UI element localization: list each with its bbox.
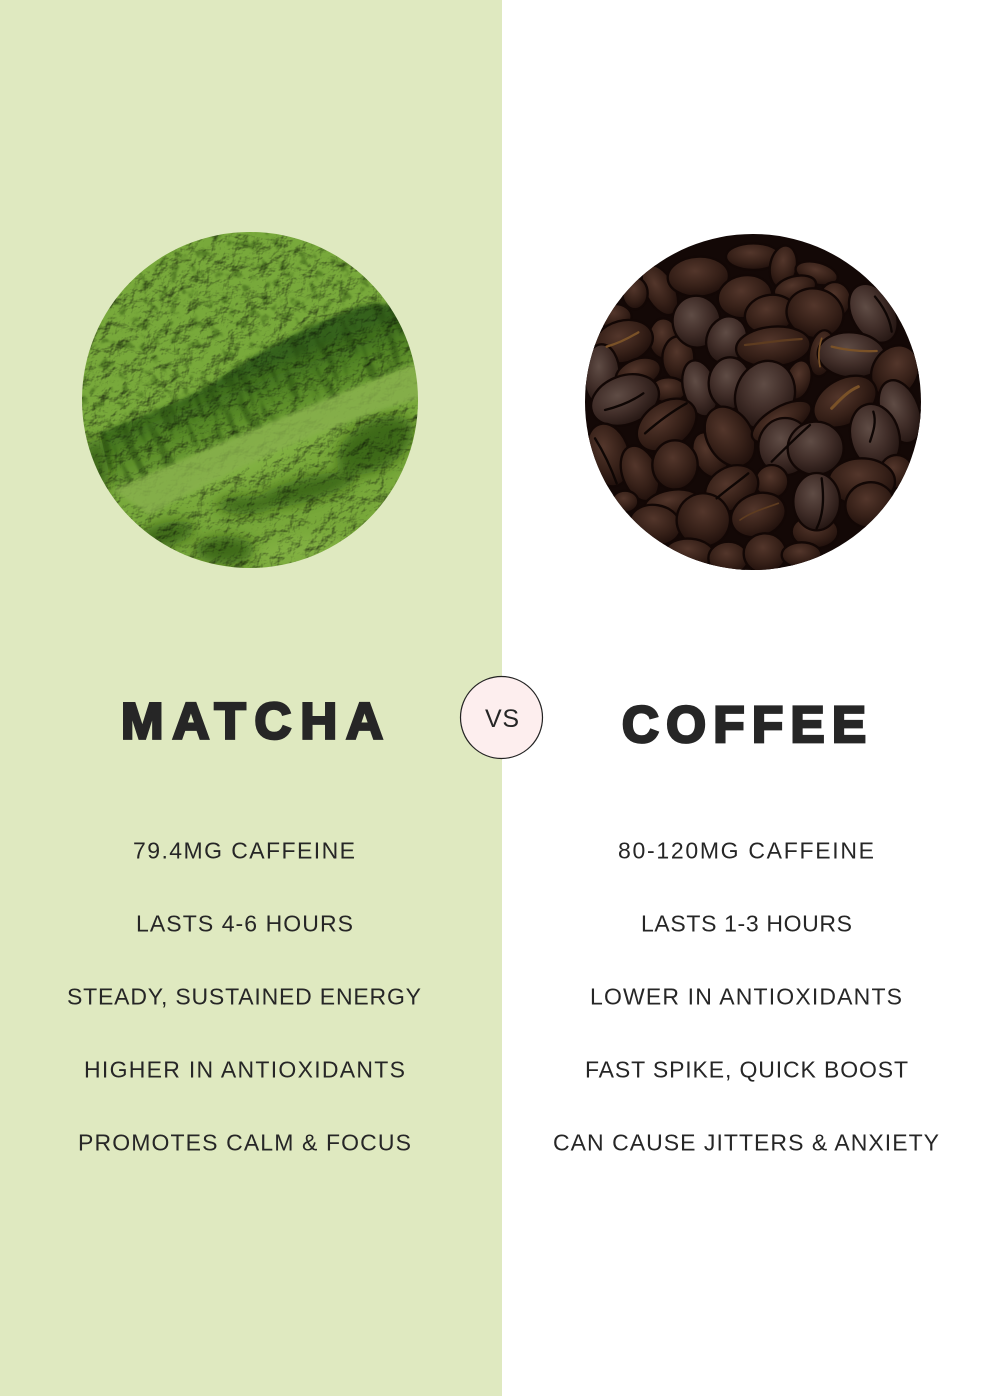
text block: matcha facts: PROMOTES CALM & FOCUS bbox=[78, 1130, 411, 1156]
text block: coffee facts: LASTS 1-3 HOURS bbox=[641, 910, 852, 936]
panel: matcha background bbox=[0, 0, 502, 1396]
matcha smooth strip bbox=[113, 360, 425, 515]
text block: matcha facts: STEADY, SUSTAINED ENERGY bbox=[67, 984, 421, 1010]
text block: coffee facts: 80-120MG CAFFEINE bbox=[618, 838, 874, 864]
text block: coffee facts bbox=[553, 838, 939, 1156]
heading: coffee: COFFEE bbox=[622, 696, 866, 753]
vs badge: VS bbox=[485, 705, 519, 733]
text block: coffee facts: FAST SPIKE, QUICK BOOST bbox=[585, 1056, 908, 1082]
heading: matcha: MATCHA bbox=[121, 692, 383, 750]
vs badge bbox=[460, 676, 542, 758]
text block: coffee facts: CAN CAUSE JITTERS & ANXIETY bbox=[553, 1130, 939, 1156]
image: coffee beans circle bbox=[580, 230, 929, 576]
text block: matcha facts: 79.4MG CAFFEINE bbox=[133, 838, 355, 864]
coffee bean creases bbox=[595, 297, 892, 528]
text block: matcha facts: LASTS 4-6 HOURS bbox=[136, 910, 353, 936]
image: matcha powder circle bbox=[82, 232, 418, 568]
matcha lower mound bbox=[130, 397, 425, 575]
text block: coffee facts: LOWER IN ANTIOXIDANTS bbox=[590, 984, 902, 1010]
text block: matcha facts bbox=[67, 838, 421, 1156]
panel: coffee background bbox=[502, 0, 1000, 1396]
text block: matcha facts: HIGHER IN ANTIOXIDANTS bbox=[84, 1056, 405, 1082]
matcha shadowed trench bbox=[100, 304, 420, 490]
